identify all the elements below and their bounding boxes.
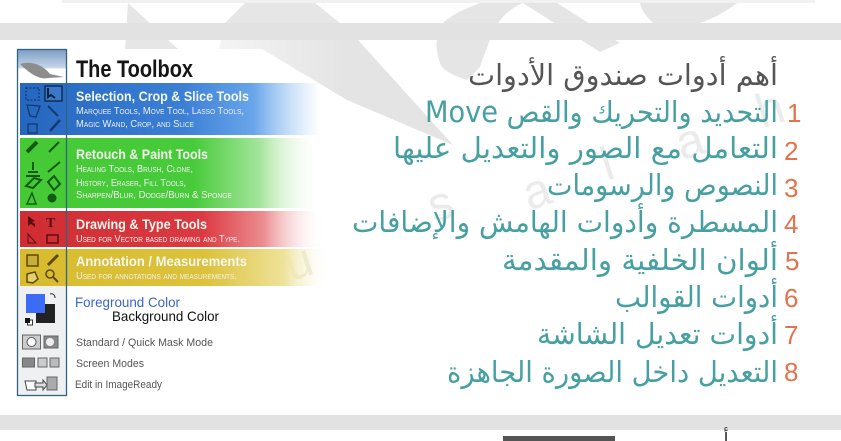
item 1: التحديد والتحريك والقص Move (425, 95, 778, 129)
icons: drawing tools (28, 216, 58, 243)
watermark shapes: a (669, 112, 711, 171)
watermark shapes: s (421, 176, 460, 233)
text: mode labels: Standard / Quick Mask Mode (76, 337, 213, 349)
text: selection tools: Marquee Tools, Move Tool, Lasso Tools, (76, 106, 244, 117)
item 2: 2 (784, 136, 798, 166)
text: selection tools: Selection, Crop & Slice Tools (76, 88, 249, 104)
icons: selection tools (26, 86, 62, 133)
icon: mask mode buttons (22, 335, 58, 349)
panel: toolbox strip (18, 50, 66, 396)
item 7: 7 (784, 320, 798, 350)
watermark shapes (62, 0, 815, 292)
bottom gray band (0, 415, 841, 430)
text: color labels: Foreground Color (75, 294, 180, 310)
icon: edit in ImageReady (25, 377, 57, 390)
item 4: 4 (784, 209, 798, 239)
item 5: ألوان الخلفية والمقدمة (502, 240, 778, 277)
item 5: 5 (785, 246, 799, 276)
text: retouch tools: Retouch & Paint Tools (76, 146, 208, 162)
text: retouch tools: Sharpen/Blur, Dodge/Burn & Sponge (76, 190, 232, 201)
text: mode labels: Edit in ImageReady (75, 379, 162, 391)
retouch bar (20, 138, 320, 208)
text: annotation tools: Used for annotations and measurements. (76, 271, 237, 282)
item 3: النصوص والرسومات (547, 168, 778, 202)
text: color labels: Background Color (112, 308, 219, 324)
heading: Arabic title: أهم أدوات صندوق الأدوات (468, 55, 778, 93)
feather header (18, 50, 66, 82)
selection bar (20, 83, 320, 135)
text: mode labels: Screen Modes (76, 358, 144, 370)
text: drawing tools: Drawing & Type Tools (76, 216, 207, 232)
drawing bar (20, 211, 325, 247)
text: annotation tools (76, 253, 247, 282)
item 8: التعديل داخل الصورة الجاهزة (447, 355, 778, 389)
text: retouch tools: History, Eraser, Fill Tools, (76, 178, 186, 189)
item 6: أدوات القوالب (615, 277, 778, 314)
text: retouch tools: Healing Tools, Brush, Clone, (76, 164, 193, 175)
text: annotation tools: Annotation / Measurements (76, 253, 247, 269)
text: retouch tools (76, 146, 232, 201)
text: drawing tools: Used for Vector based drawing and Type. (76, 234, 240, 245)
annotation bar (20, 249, 330, 286)
text: mode labels (75, 337, 213, 391)
watermark shapes: h (749, 80, 791, 139)
text: selection tools (76, 88, 249, 130)
heading: The Toolbox: The Toolbox (76, 56, 194, 83)
icons: drawing tools: T (46, 216, 56, 231)
text: drawing tools (76, 216, 240, 245)
text: color labels (75, 294, 219, 324)
watermark shapes: u (278, 233, 319, 292)
item 2: التعامل مع الصور والتعديل عليها (393, 131, 778, 165)
item 3: 3 (784, 173, 798, 203)
item 1: 1 (787, 98, 801, 128)
watermark shapes: a (516, 162, 558, 221)
icon: screen mode buttons (22, 358, 59, 367)
watermark shapes: l (594, 138, 620, 191)
item 4: المسطرة وأدوات الهامش والإضافات (352, 202, 778, 240)
item 8: 8 (784, 357, 798, 387)
panel: color bars (20, 83, 330, 286)
item 7: أدوات تعديل الشاشة (537, 314, 778, 351)
list: toolbox items (352, 95, 801, 389)
top gray band (0, 23, 841, 40)
icons: annotation tools (27, 255, 58, 283)
bottom dark box (503, 436, 615, 441)
icons: retouch tools (26, 142, 60, 204)
item 6: 6 (784, 283, 798, 313)
icon: foreground and background color (25, 294, 55, 325)
text: selection tools: Magic Wand, Crop, and Slice (76, 119, 194, 130)
